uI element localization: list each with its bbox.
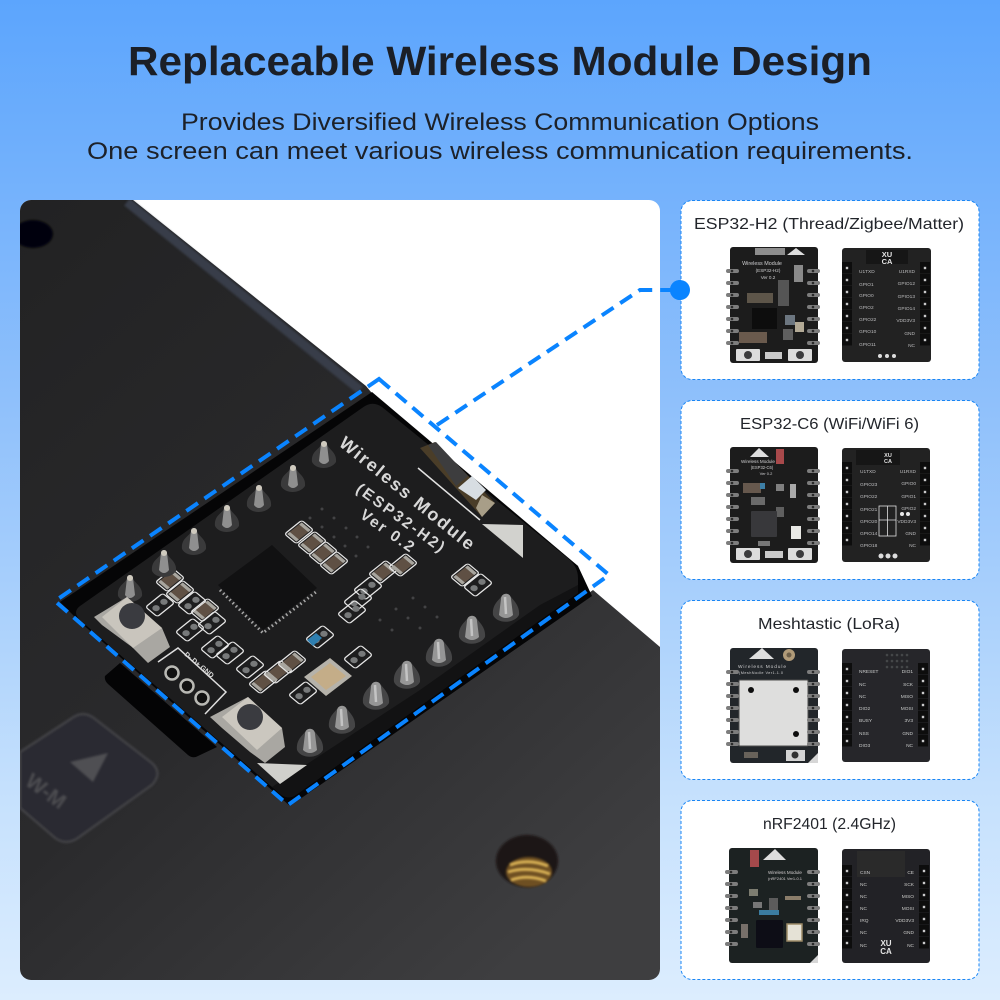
subtitle: One screen can meet various wireless communication requirements. <box>87 138 913 165</box>
title: Replaceable Wireless Module Design <box>128 38 872 84</box>
module back: MISO <box>901 694 913 700</box>
module back: NC <box>906 743 914 749</box>
module back: GPIO14 <box>860 531 878 537</box>
callout: dashed highlight frame <box>55 379 609 805</box>
crystal <box>304 658 352 696</box>
module back: GPIO22 <box>860 494 878 500</box>
module back: NC <box>860 894 867 900</box>
card: ESP32-C6: ESP32-C6 (WiFi/WiFi 6) <box>740 416 919 433</box>
module back: BUSY <box>859 718 873 724</box>
module back: GPIO2 <box>859 305 874 311</box>
module back: U1RXD <box>900 469 917 475</box>
module back: CE <box>907 870 914 876</box>
card: Meshtastic: Meshtastic (LoRa) <box>758 616 900 633</box>
module back: NC <box>859 682 866 688</box>
module back: GPIO22 <box>859 317 877 323</box>
module back: NC <box>860 943 867 949</box>
module back: NSS <box>859 731 869 737</box>
module front: Wireless Module <box>738 664 786 670</box>
module front: Wireless Module <box>741 459 775 464</box>
module back: GPIO2 <box>901 506 916 512</box>
module back: XU <box>882 250 892 259</box>
card slot <box>105 663 217 757</box>
module back: NC <box>860 906 867 912</box>
module back: XU <box>880 939 892 948</box>
button right <box>210 697 285 763</box>
subtitle <box>87 109 913 165</box>
module front: Ver 0.2 <box>761 275 776 280</box>
wireless module board <box>76 404 578 797</box>
module front: (ESP32-H2) <box>756 268 781 273</box>
module front: (ESP32-C6) <box>751 465 774 470</box>
module back: GPIO20 <box>860 519 878 525</box>
module back: NC <box>909 543 917 549</box>
module back: NC <box>860 882 867 888</box>
card: nRF2401: nRF2401 (2.4GHz) <box>763 816 896 833</box>
header pins upper side <box>118 441 336 602</box>
module name silkscreen: Wireless Module <box>335 433 479 554</box>
module back: CA <box>884 459 892 465</box>
module front: (MeshNodle Ver1-1.0 <box>739 671 783 675</box>
module front: (nRF2401 Ver1-0.1 <box>768 876 803 881</box>
surface-mount parts <box>146 520 492 705</box>
card: ESP32-H2 <box>670 200 979 380</box>
module front <box>728 648 818 763</box>
card: nRF2401 <box>681 800 979 980</box>
module back: GND <box>904 331 916 337</box>
silkscreen triangle: lower <box>257 763 307 784</box>
module back: CSN <box>860 870 871 876</box>
module back: GND <box>902 731 914 737</box>
module back: GPIO11 <box>859 342 876 348</box>
module front <box>728 447 818 563</box>
module back: MOSI <box>901 706 913 712</box>
module back: GPIO1 <box>901 494 916 500</box>
main chip <box>218 545 317 633</box>
module back <box>842 849 930 963</box>
module back: SCK <box>903 682 914 688</box>
silkscreen triangle: upper <box>482 524 523 558</box>
module back: DIO3 <box>859 743 871 749</box>
module back: MISO <box>902 894 914 900</box>
mounting hole <box>20 220 54 248</box>
module back: XU <box>884 453 892 459</box>
module back: 3V3 <box>904 718 913 724</box>
module back: NC <box>859 694 866 700</box>
header pins lower side <box>297 594 519 757</box>
W-M port label: W-M <box>21 769 70 814</box>
module back: GPIO13 <box>898 294 915 300</box>
blue capacitor <box>307 633 322 646</box>
card: ESP32-C6 <box>681 400 979 580</box>
module name silkscreen: (ESP32-H2) <box>353 480 448 556</box>
panel: device photo <box>13 200 660 980</box>
module back <box>842 248 931 362</box>
cavity shadow <box>60 392 592 806</box>
module back: GND <box>905 531 917 537</box>
connector <box>418 442 495 520</box>
module back: NC <box>860 930 867 936</box>
module back: CA <box>880 947 892 956</box>
via dots <box>308 508 438 632</box>
module back: NC <box>908 343 916 349</box>
module front <box>728 247 818 363</box>
module back: MOSI <box>902 906 914 912</box>
card: ESP32-H2: ESP32-H2 (Thread/Zigbee/Matter) <box>694 216 964 233</box>
module back: VDD3V3 <box>897 519 916 525</box>
module back: DIO1 <box>902 669 913 675</box>
module back: CA <box>882 257 893 266</box>
module back: NRESET <box>859 669 879 675</box>
module back: SCK <box>904 882 915 888</box>
module back <box>842 448 930 562</box>
module back: U1TXD <box>860 469 876 475</box>
card: Meshtastic <box>681 600 979 780</box>
module front: Ver 0.2 <box>760 471 773 476</box>
module back: U1TXD <box>859 269 875 275</box>
module back: GPIO12 <box>898 281 915 287</box>
module back: GPIO23 <box>860 482 878 488</box>
button left <box>94 597 170 663</box>
W-M port label <box>20 714 158 842</box>
module front <box>727 848 818 963</box>
subtitle: Provides Diversified Wireless Communication Options <box>181 109 819 136</box>
module back: DIO2 <box>859 706 871 712</box>
module back: VDD3V3 <box>896 318 915 324</box>
device body <box>20 200 660 980</box>
module back: GPIO1 <box>859 282 874 288</box>
module back: GPIO0 <box>901 481 916 487</box>
module back: IRQ <box>860 918 869 924</box>
USB pads: D- D+ GND <box>183 651 215 680</box>
module back: GPIO0 <box>859 293 874 299</box>
module front: Wireless Module <box>768 870 802 875</box>
module back: GND <box>903 930 915 936</box>
brass screw insert <box>496 835 558 887</box>
module back: GPIO14 <box>898 306 915 312</box>
module front: Wireless Module <box>742 261 782 267</box>
module back: VDD3V3 <box>895 918 914 924</box>
module back: GPIO10 <box>859 329 877 335</box>
callout: leader line <box>437 280 690 425</box>
module name silkscreen: Ver 0.2 <box>357 506 417 556</box>
module back: U1RXD <box>899 269 916 275</box>
module back <box>842 649 930 762</box>
module back: NC <box>907 943 915 949</box>
USB pads <box>158 648 226 714</box>
device edge highlight <box>127 202 360 390</box>
module back: GPIO18 <box>860 543 878 549</box>
module back: GPIO21 <box>860 507 878 513</box>
